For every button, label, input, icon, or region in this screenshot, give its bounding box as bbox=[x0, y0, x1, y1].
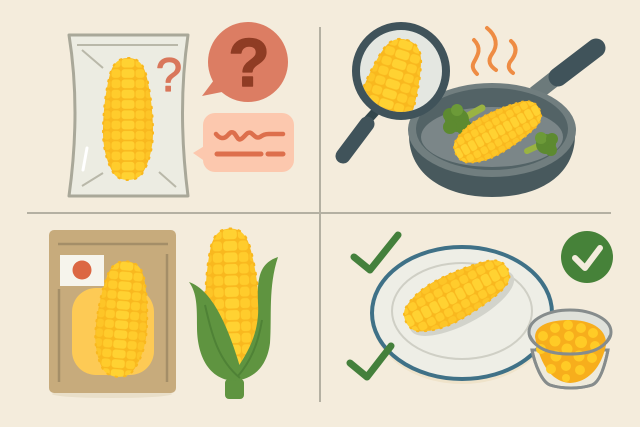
broccoli left bbox=[443, 104, 482, 135]
vertical divider bbox=[319, 27, 321, 402]
magnifier bbox=[343, 26, 446, 165]
pouch bbox=[49, 230, 176, 398]
small question mark: ? bbox=[156, 48, 182, 101]
panel: imported pouch and fresh corn bbox=[49, 228, 278, 399]
broccoli right bbox=[527, 132, 558, 156]
panel: packaged corn with questions bbox=[69, 22, 294, 196]
panel: pan with corn and magnifier bbox=[343, 26, 596, 197]
corn in pan bbox=[446, 91, 549, 173]
check mark top bbox=[354, 235, 398, 270]
pan handle bbox=[535, 48, 596, 94]
glass bowl of kernels bbox=[529, 310, 611, 388]
corn cob in bag bbox=[103, 58, 153, 180]
vacuum bag bbox=[69, 35, 188, 196]
flag label bbox=[60, 255, 104, 286]
plate bbox=[372, 247, 552, 384]
speech bubble: question: ? bbox=[228, 25, 270, 101]
steam bbox=[473, 28, 516, 74]
check badge bbox=[561, 231, 613, 283]
corn on pouch bbox=[92, 259, 153, 379]
panel: plated corn with checks bbox=[350, 231, 613, 388]
corn on plate bbox=[395, 248, 523, 349]
speech bubble: question bbox=[202, 22, 288, 102]
frying pan bbox=[408, 83, 576, 197]
check mark bottom bbox=[350, 346, 391, 377]
speech bubble: garbled text bbox=[193, 113, 294, 172]
horizontal divider bbox=[27, 212, 611, 214]
fresh corn with husk bbox=[189, 228, 278, 399]
